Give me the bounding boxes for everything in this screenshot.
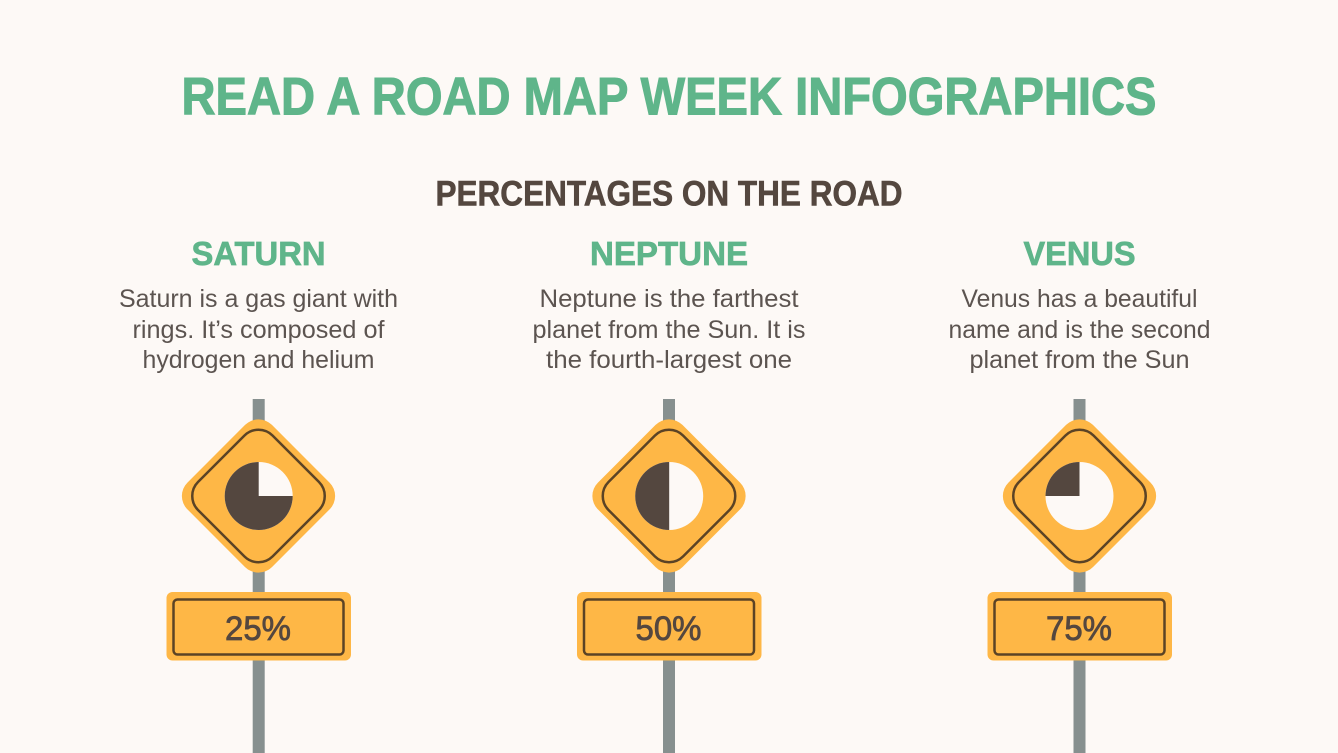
text block: Venus description: planet from the Sun xyxy=(970,346,1190,374)
text block: Saturn description: rings. It’s composed of xyxy=(132,316,385,344)
icon: pie chart 50% xyxy=(635,462,703,530)
percentage label: 75% xyxy=(1046,610,1112,648)
title: READ A ROAD MAP WEEK INFOGRAPHICS xyxy=(182,68,1156,126)
subtitle: PERCENTAGES ON THE ROAD xyxy=(436,174,902,214)
text block: Saturn description: Saturn is a gas giant with xyxy=(119,285,398,313)
panel: Venus xyxy=(948,236,1210,753)
text block: Neptune description: Neptune is the farthest xyxy=(540,285,799,313)
percentage label: 25% xyxy=(225,610,291,648)
text block: Venus description: name and is the second xyxy=(948,316,1210,344)
percentage label: 50% xyxy=(636,610,702,648)
text block: Saturn description xyxy=(119,285,398,374)
icon: pie chart 25% xyxy=(225,462,293,530)
text block: Saturn description: hydrogen and helium xyxy=(142,346,374,374)
panel: Neptune xyxy=(532,236,806,753)
heading: Neptune: NEPTUNE xyxy=(590,236,748,273)
text block: Venus description xyxy=(948,285,1210,374)
panel: Saturn xyxy=(119,236,398,753)
road sign: Saturn 25% xyxy=(166,399,351,753)
text block: Neptune description: the fourth-largest one xyxy=(546,346,792,374)
road sign: Venus 75% xyxy=(988,399,1172,753)
text block: Venus description: Venus has a beautiful xyxy=(962,285,1198,313)
text block: Neptune description: planet from the Sun. It is xyxy=(532,316,806,344)
heading: Saturn: SATURN xyxy=(192,236,326,273)
road sign: Neptune 50% xyxy=(577,399,762,753)
icon: pie chart 75% xyxy=(1046,462,1114,530)
text block: Neptune description xyxy=(532,285,806,374)
heading: Venus: VENUS xyxy=(1024,236,1136,273)
